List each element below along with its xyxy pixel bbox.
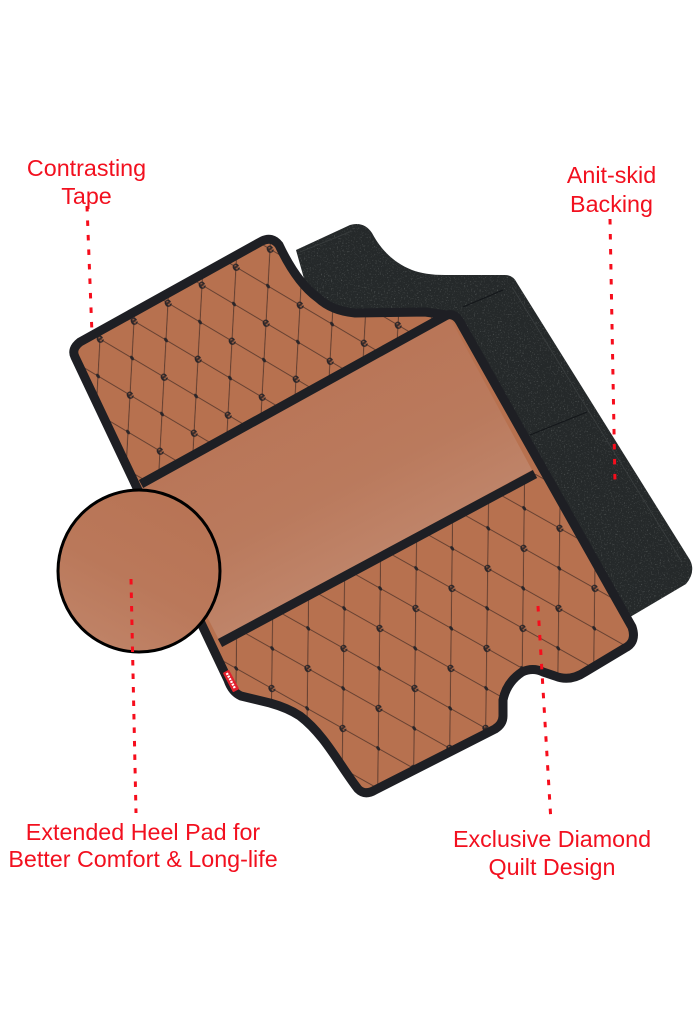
label: contrasting tape: Contrasting	[27, 155, 146, 181]
contrasting tape border	[74, 239, 633, 793]
back mat: anti-skid backing	[290, 220, 700, 620]
leader line: anti-skid backing	[610, 219, 615, 483]
brand tag	[223, 670, 239, 692]
label: exclusive diamond quilt: Quilt Design	[489, 854, 615, 880]
front mat: tan base	[74, 239, 633, 793]
label: extended heel pad: Better Comfort & Long-life	[8, 846, 278, 872]
upper diamond quilt area	[85, 244, 432, 479]
lower diamond quilt area	[224, 474, 624, 786]
label: anti-skid backing: Anit-skid	[567, 162, 656, 188]
label: extended heel pad	[8, 819, 278, 872]
label: extended heel pad: Extended Heel Pad for	[26, 819, 260, 845]
infographic canvas	[10, 159, 692, 880]
leader line: diamond quilt	[538, 606, 551, 822]
label: exclusive diamond quilt: Exclusive Diamond	[453, 826, 651, 852]
leader line: contrasting tape	[87, 206, 92, 334]
band binding strips	[141, 315, 535, 643]
label: anti-skid backing	[567, 162, 656, 217]
heel pad band	[141, 318, 532, 640]
leader line: heel pad	[131, 579, 136, 813]
magnifier circle: heel pad close-up	[58, 490, 220, 652]
label: contrasting tape	[27, 155, 146, 209]
label: contrasting tape: Tape	[61, 183, 112, 209]
label: exclusive diamond quilt	[453, 826, 651, 880]
label: anti-skid backing: Backing	[570, 191, 653, 217]
